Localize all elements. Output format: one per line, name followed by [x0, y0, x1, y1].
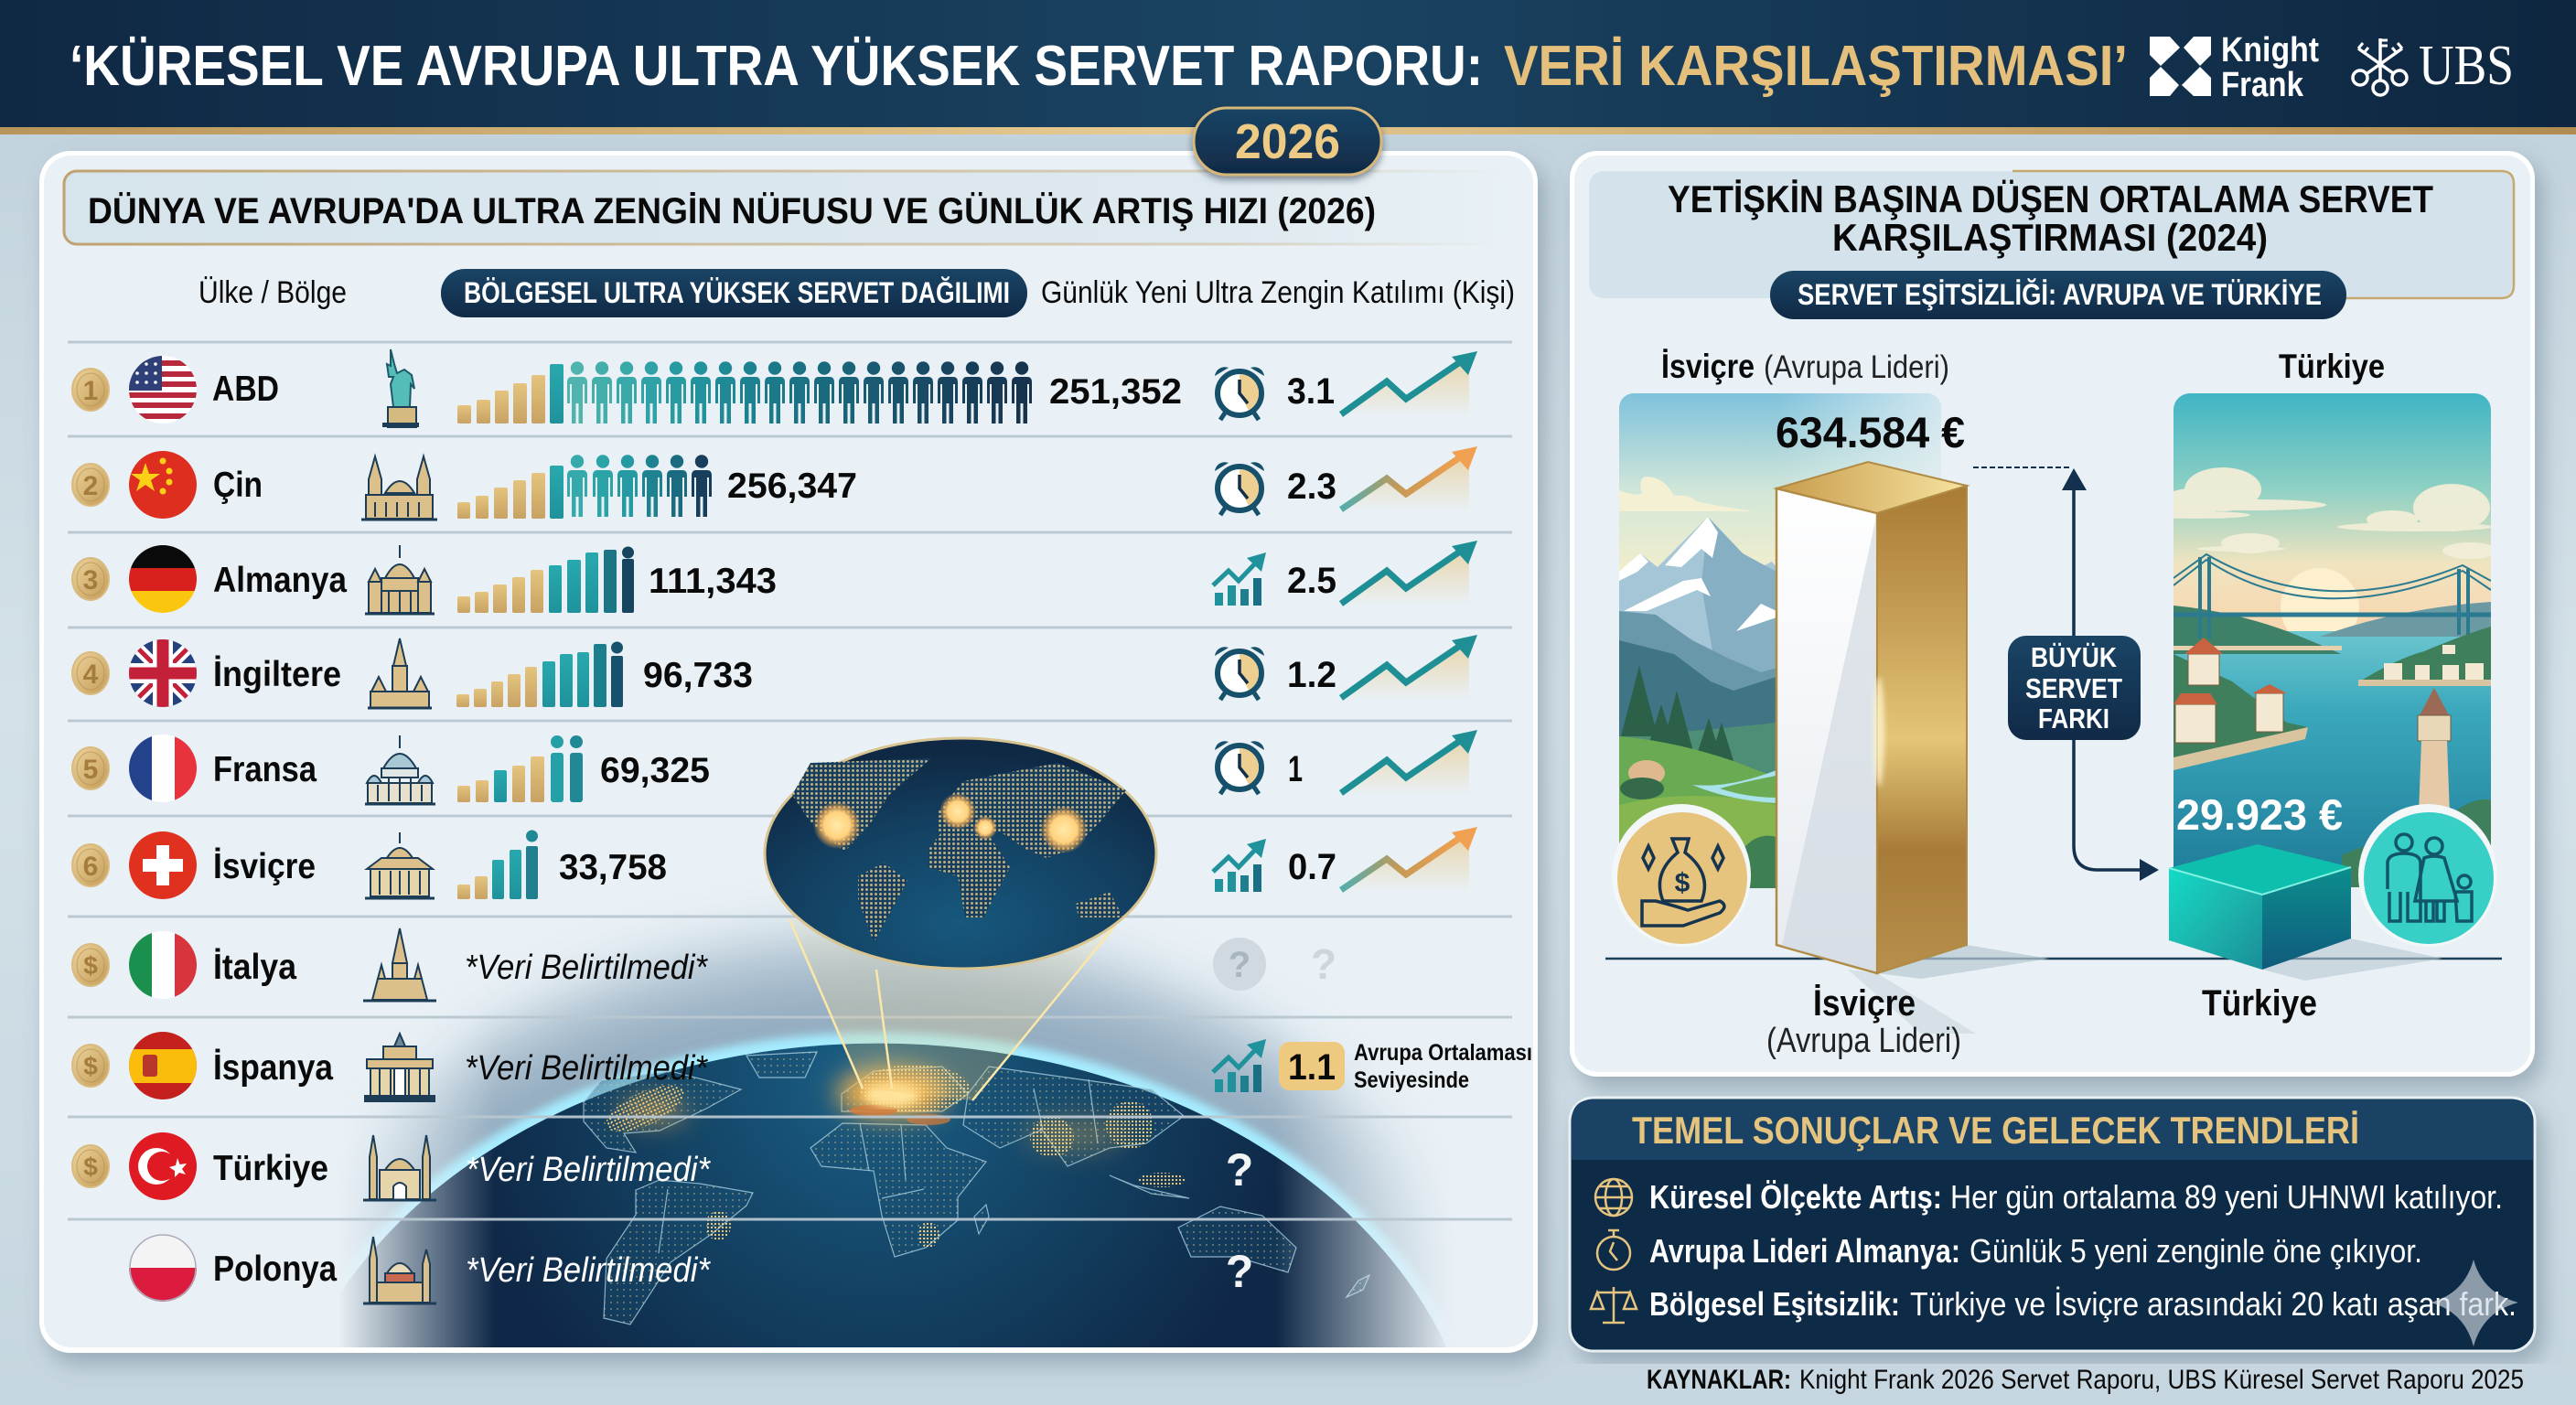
- panel heading: YETİŞKİN BAŞINA DÜŞEN ORTALAMA SERVET: [1668, 177, 2433, 220]
- country name: Almanya: [213, 561, 347, 600]
- column header: country: Ülke / Bölge: [199, 275, 347, 310]
- trend arrow: [1341, 541, 1477, 606]
- panel heading: [1589, 171, 2514, 298]
- subheading pill: [1770, 271, 2346, 319]
- medal 2: 2: [83, 471, 98, 501]
- column header: daily: Günlük Yeni Ultra Zengin Katılımı (Kişi): [1041, 275, 1515, 310]
- column header: distribution pill: BÖLGESEL ULTRA YÜKSEK SERVET DAĞILIMI: [464, 276, 1010, 309]
- medal 2: [72, 464, 109, 506]
- value: Switzerland: 634.584 €: [1776, 408, 1965, 456]
- label: Türkiye: Türkiye: [2279, 348, 2385, 385]
- icon: statue of liberty: [382, 349, 419, 427]
- medal 5: [72, 747, 109, 789]
- trend arrow: [1341, 351, 1477, 417]
- axis label: İsviçre: İsviçre: [1813, 983, 1916, 1024]
- medal 1: 1: [83, 376, 98, 406]
- trend arrow: [1341, 635, 1477, 701]
- note: Europe average: Avrupa Ortalaması: [1354, 1040, 1532, 1066]
- title: ‘KÜRESEL VE AVRUPA ULTRA YÜKSEK SERVET RAPORU:: [70, 35, 1483, 98]
- panel heading: DÜNYA VE AVRUPA'DA ULTRA ZENGİN NÜFUSU VE GÜNLÜK ARTIŞ HIZI (2026): [88, 190, 1376, 231]
- title: VERİ KARŞILAŞTIRMASI’: [1504, 35, 2128, 98]
- value: 69,325: [600, 751, 710, 790]
- daily rate: 2.3: [1287, 467, 1336, 507]
- year badge: 2026: [1235, 114, 1340, 169]
- medal 4: [72, 652, 109, 694]
- medal coin: $: [83, 951, 98, 980]
- medal coin: [72, 944, 109, 986]
- icon: stopwatch: [1597, 1230, 1630, 1270]
- no data note: *Veri Belirtilmedi*: [465, 1049, 708, 1088]
- logo: Knight Frank: [2150, 31, 2319, 104]
- row: Türkiye: [72, 1132, 1253, 1200]
- row: Polonya: [129, 1234, 1253, 1303]
- medal 6: [72, 844, 109, 886]
- no data note: *Veri Belirtilmedi*: [465, 949, 708, 987]
- bars: [456, 642, 623, 707]
- finding: regional inequality: [1649, 1285, 2517, 1323]
- trend arrow: [1341, 730, 1477, 796]
- flag: Poland: [129, 1234, 197, 1302]
- icon: domed parliament: [365, 545, 435, 614]
- callout: big wealth gap: [2008, 636, 2141, 740]
- medal 4: 4: [83, 660, 99, 690]
- flag: Spain: [129, 1032, 197, 1099]
- medal coin: [72, 1145, 109, 1187]
- icon: clock: [1215, 741, 1264, 794]
- icon: cathedral: [363, 928, 436, 1001]
- row: İngiltere: [72, 635, 1477, 708]
- unknown rate: [1213, 938, 1336, 991]
- money bag medallion: [1612, 804, 1751, 947]
- bars: [457, 547, 634, 613]
- row: İtalya: [72, 928, 1336, 1001]
- trend arrow: [1341, 446, 1477, 512]
- illustration: Swiss landscape: [1619, 393, 1941, 888]
- row: Almanya: [72, 541, 1477, 614]
- sources: KAYNAKLAR:: [1647, 1365, 1791, 1395]
- country name: Türkiye: [213, 1149, 328, 1188]
- value: 33,758: [559, 848, 667, 887]
- row: Fransa: [72, 730, 1477, 804]
- country name: İngiltere: [213, 655, 341, 694]
- row: İsviçre: [72, 827, 1477, 899]
- axis label: İsviçre: (Avrupa Lideri): [1766, 1022, 1961, 1060]
- finding: Europe leader: [1649, 1232, 2422, 1270]
- country name: Fransa: [213, 750, 317, 789]
- icon: clock: [1215, 367, 1264, 420]
- country name: İsviçre: [213, 847, 316, 886]
- unknown rate: ?: [1226, 1144, 1253, 1196]
- callout: big wealth gap: SERVET: [2025, 672, 2122, 704]
- icon: globe: [1595, 1179, 1632, 1216]
- world globe illustration: [344, 909, 1447, 1347]
- bars and people: [457, 361, 1032, 424]
- bars and people: [457, 455, 712, 519]
- flag: Switzerland: [129, 831, 197, 899]
- logo: Knight Frank: Frank: [2221, 66, 2304, 104]
- daily rate: 2.5: [1287, 561, 1336, 601]
- dashed connector: [1973, 467, 2072, 468]
- flag: Germany: [129, 545, 197, 613]
- axis label: Türkiye: Türkiye: [2202, 983, 2317, 1024]
- flag: UK: [129, 639, 197, 707]
- row: ABD: [72, 349, 1477, 427]
- country name: Polonya: [213, 1249, 337, 1289]
- gold bar: Switzerland: [1776, 462, 2049, 1034]
- value: 256,347: [727, 467, 857, 506]
- family medallion: [2358, 804, 2497, 947]
- note: Europe average: [1354, 1040, 1532, 1093]
- flag: China: [129, 451, 197, 519]
- icon: federal palace: [365, 832, 435, 898]
- medal coin: $: [83, 1052, 98, 1080]
- sparkle: [2431, 1260, 2518, 1346]
- daily rate chip: 1.1: [1288, 1047, 1336, 1088]
- finding: global: Her gün ortalama 89 yeni UHNWI katılıyor.: [1950, 1178, 2503, 1216]
- bars and people: [457, 735, 583, 802]
- country name: ABD: [212, 370, 279, 409]
- icon: tower: [368, 638, 432, 708]
- value: Turkey: 29.923 €: [2176, 790, 2343, 839]
- trend arrow: [1341, 827, 1477, 893]
- daily rate: 0.7: [1288, 847, 1336, 887]
- row: İspanya: [72, 1032, 1532, 1101]
- value: 251,352: [1049, 372, 1182, 412]
- medal coin: [72, 1045, 109, 1087]
- flag: France: [129, 735, 197, 802]
- arrow: wealth gap: [2062, 468, 2159, 881]
- panel: right, wealth comparison: [1570, 151, 2535, 1077]
- label: İsviçre: [1661, 348, 1949, 385]
- value: 96,733: [643, 656, 753, 695]
- icon: gate: [365, 1034, 435, 1101]
- finding: regional inequality: Bölgesel Eşitsizlik:: [1649, 1285, 1900, 1323]
- unknown rate: ?: [1229, 945, 1250, 985]
- teal cube: Turkey: [2169, 844, 2442, 981]
- unknown rate: ?: [1226, 1246, 1253, 1297]
- country name: İspanya: [213, 1048, 333, 1088]
- header band: [0, 0, 2576, 134]
- medal 1: [72, 369, 109, 411]
- panel: left, ultra rich population: [39, 151, 1538, 1354]
- flag: Italy: [129, 931, 197, 999]
- icon: cathedral: [361, 456, 437, 520]
- label: İsviçre: (Avrupa Lideri): [1764, 349, 1949, 385]
- subheading pill: SERVET EŞİTSİZLİĞİ: AVRUPA VE TÜRKİYE: [1798, 278, 2322, 311]
- medal 3: [72, 558, 109, 600]
- bars and person: [457, 831, 538, 899]
- country name: Çin: [213, 466, 263, 505]
- column header: distribution pill: [441, 269, 1027, 317]
- year badge: [1194, 108, 1381, 175]
- daily rate chip: [1279, 1042, 1345, 1090]
- callout: big wealth gap: BÜYÜK: [2031, 641, 2118, 673]
- value: 111,343: [649, 562, 777, 601]
- icon: growth chart: [1213, 552, 1266, 606]
- no data note: *Veri Belirtilmedi*: [466, 1151, 711, 1189]
- icon: palace: [363, 1237, 436, 1303]
- daily rate: 1: [1288, 749, 1303, 789]
- icon: growth chart: [1213, 839, 1266, 892]
- medal 3: 3: [83, 565, 98, 595]
- no data note: *Veri Belirtilmedi*: [466, 1251, 711, 1290]
- daily rate: 3.1: [1287, 371, 1335, 412]
- icon: mosque: [363, 1135, 436, 1200]
- projection cone: [789, 919, 1115, 1100]
- row: Çin: [72, 446, 1477, 520]
- icon: clock: [1215, 647, 1264, 700]
- flag: USA: [129, 356, 197, 424]
- note: Europe average: Seviyesinde: [1354, 1067, 1469, 1093]
- row divider lines: [68, 342, 1512, 1219]
- unknown rate: ?: [1311, 940, 1336, 988]
- finding: regional inequality: Türkiye ve İsviçre arasındaki 20 katı aşan fark.: [1910, 1285, 2517, 1323]
- logo: UBS: [2353, 35, 2514, 97]
- panel: key findings: [1570, 1098, 2535, 1351]
- medal coin: $: [83, 1153, 98, 1181]
- logo: UBS: UBS: [2419, 35, 2514, 97]
- callout: big wealth gap: FARKI: [2038, 702, 2109, 735]
- icon: clock: [1215, 462, 1264, 515]
- illustration: Istanbul landscape: [2141, 393, 2497, 896]
- icon: growth chart: [1213, 1039, 1266, 1092]
- panel heading: [64, 171, 1505, 244]
- logo: Knight Frank: Knight: [2221, 31, 2319, 70]
- country name: İtalya: [213, 948, 296, 987]
- finding: global: [1649, 1178, 2503, 1216]
- ground line: [1605, 958, 2502, 960]
- axis label: İsviçre: [1766, 983, 1961, 1060]
- finding: Europe leader: Avrupa Lideri Almanya:: [1649, 1232, 1960, 1270]
- label: İsviçre: İsviçre: [1661, 348, 1755, 385]
- finding: global: Küresel Ölçekte Artış:: [1649, 1178, 1942, 1216]
- daily rate: 1.2: [1287, 655, 1336, 695]
- finding: Europe leader: Günlük 5 yeni zenginle öne çıkıyor.: [1970, 1232, 2422, 1270]
- flag: Turkey: [129, 1132, 197, 1200]
- icon: pantheon dome: [365, 735, 435, 804]
- inset world map: [765, 738, 1156, 969]
- medal 5: 5: [83, 755, 98, 785]
- panel heading: KARŞILAŞTIRMASI (2024): [1832, 216, 2268, 259]
- money bag medallion: $: [1675, 868, 1690, 898]
- icon: scales: [1591, 1287, 1637, 1323]
- medal 6: 6: [83, 852, 98, 882]
- heading: TEMEL SONUÇLAR VE GELECEK TRENDLERİ: [1632, 1109, 2359, 1152]
